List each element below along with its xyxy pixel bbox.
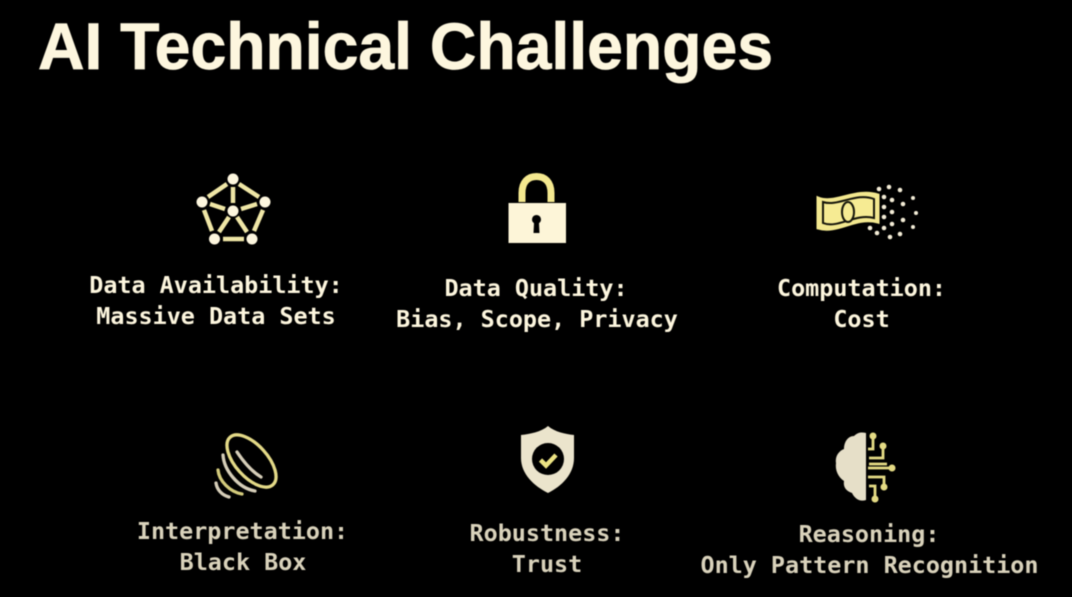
label: data quality: Bias, Scope, Privacy — [396, 305, 678, 333]
icon: half brain circuit — [836, 432, 896, 502]
label: interpretation: Black Box — [180, 548, 306, 576]
icon: shield with check — [521, 426, 574, 493]
icon: dissolving banknote — [818, 185, 918, 239]
panel: data availability — [89, 174, 343, 330]
label: robustness: Trust — [512, 550, 582, 578]
label: computation: Computation: — [777, 274, 946, 302]
label: data quality — [396, 274, 678, 333]
label: reasoning: Only Pattern Recognition — [701, 551, 1038, 579]
label: data availability: Massive Data Sets — [96, 302, 336, 330]
label: computation — [777, 274, 946, 333]
label: data quality: Data Quality: — [444, 274, 628, 302]
panel: data quality — [396, 176, 678, 333]
label: robustness: Robustness: — [470, 519, 624, 547]
icon: black box funnel — [216, 427, 285, 497]
label: computation: Cost — [833, 305, 890, 333]
label: data availability — [89, 271, 343, 330]
label: interpretation — [137, 517, 348, 576]
panel: computation — [777, 185, 946, 333]
label: interpretation: Interpretation: — [137, 517, 348, 545]
panel: reasoning — [701, 432, 1038, 579]
title: AI Technical Challenges — [38, 9, 773, 83]
icon: padlock — [508, 176, 566, 243]
panel: interpretation — [137, 427, 348, 576]
label: data availability: Data Availability: — [89, 271, 343, 299]
label: robustness — [470, 519, 624, 578]
label: reasoning — [701, 520, 1038, 579]
panel: robustness — [470, 426, 624, 578]
label: reasoning: Reasoning: — [799, 520, 939, 548]
icon: network pentagon — [196, 174, 270, 244]
